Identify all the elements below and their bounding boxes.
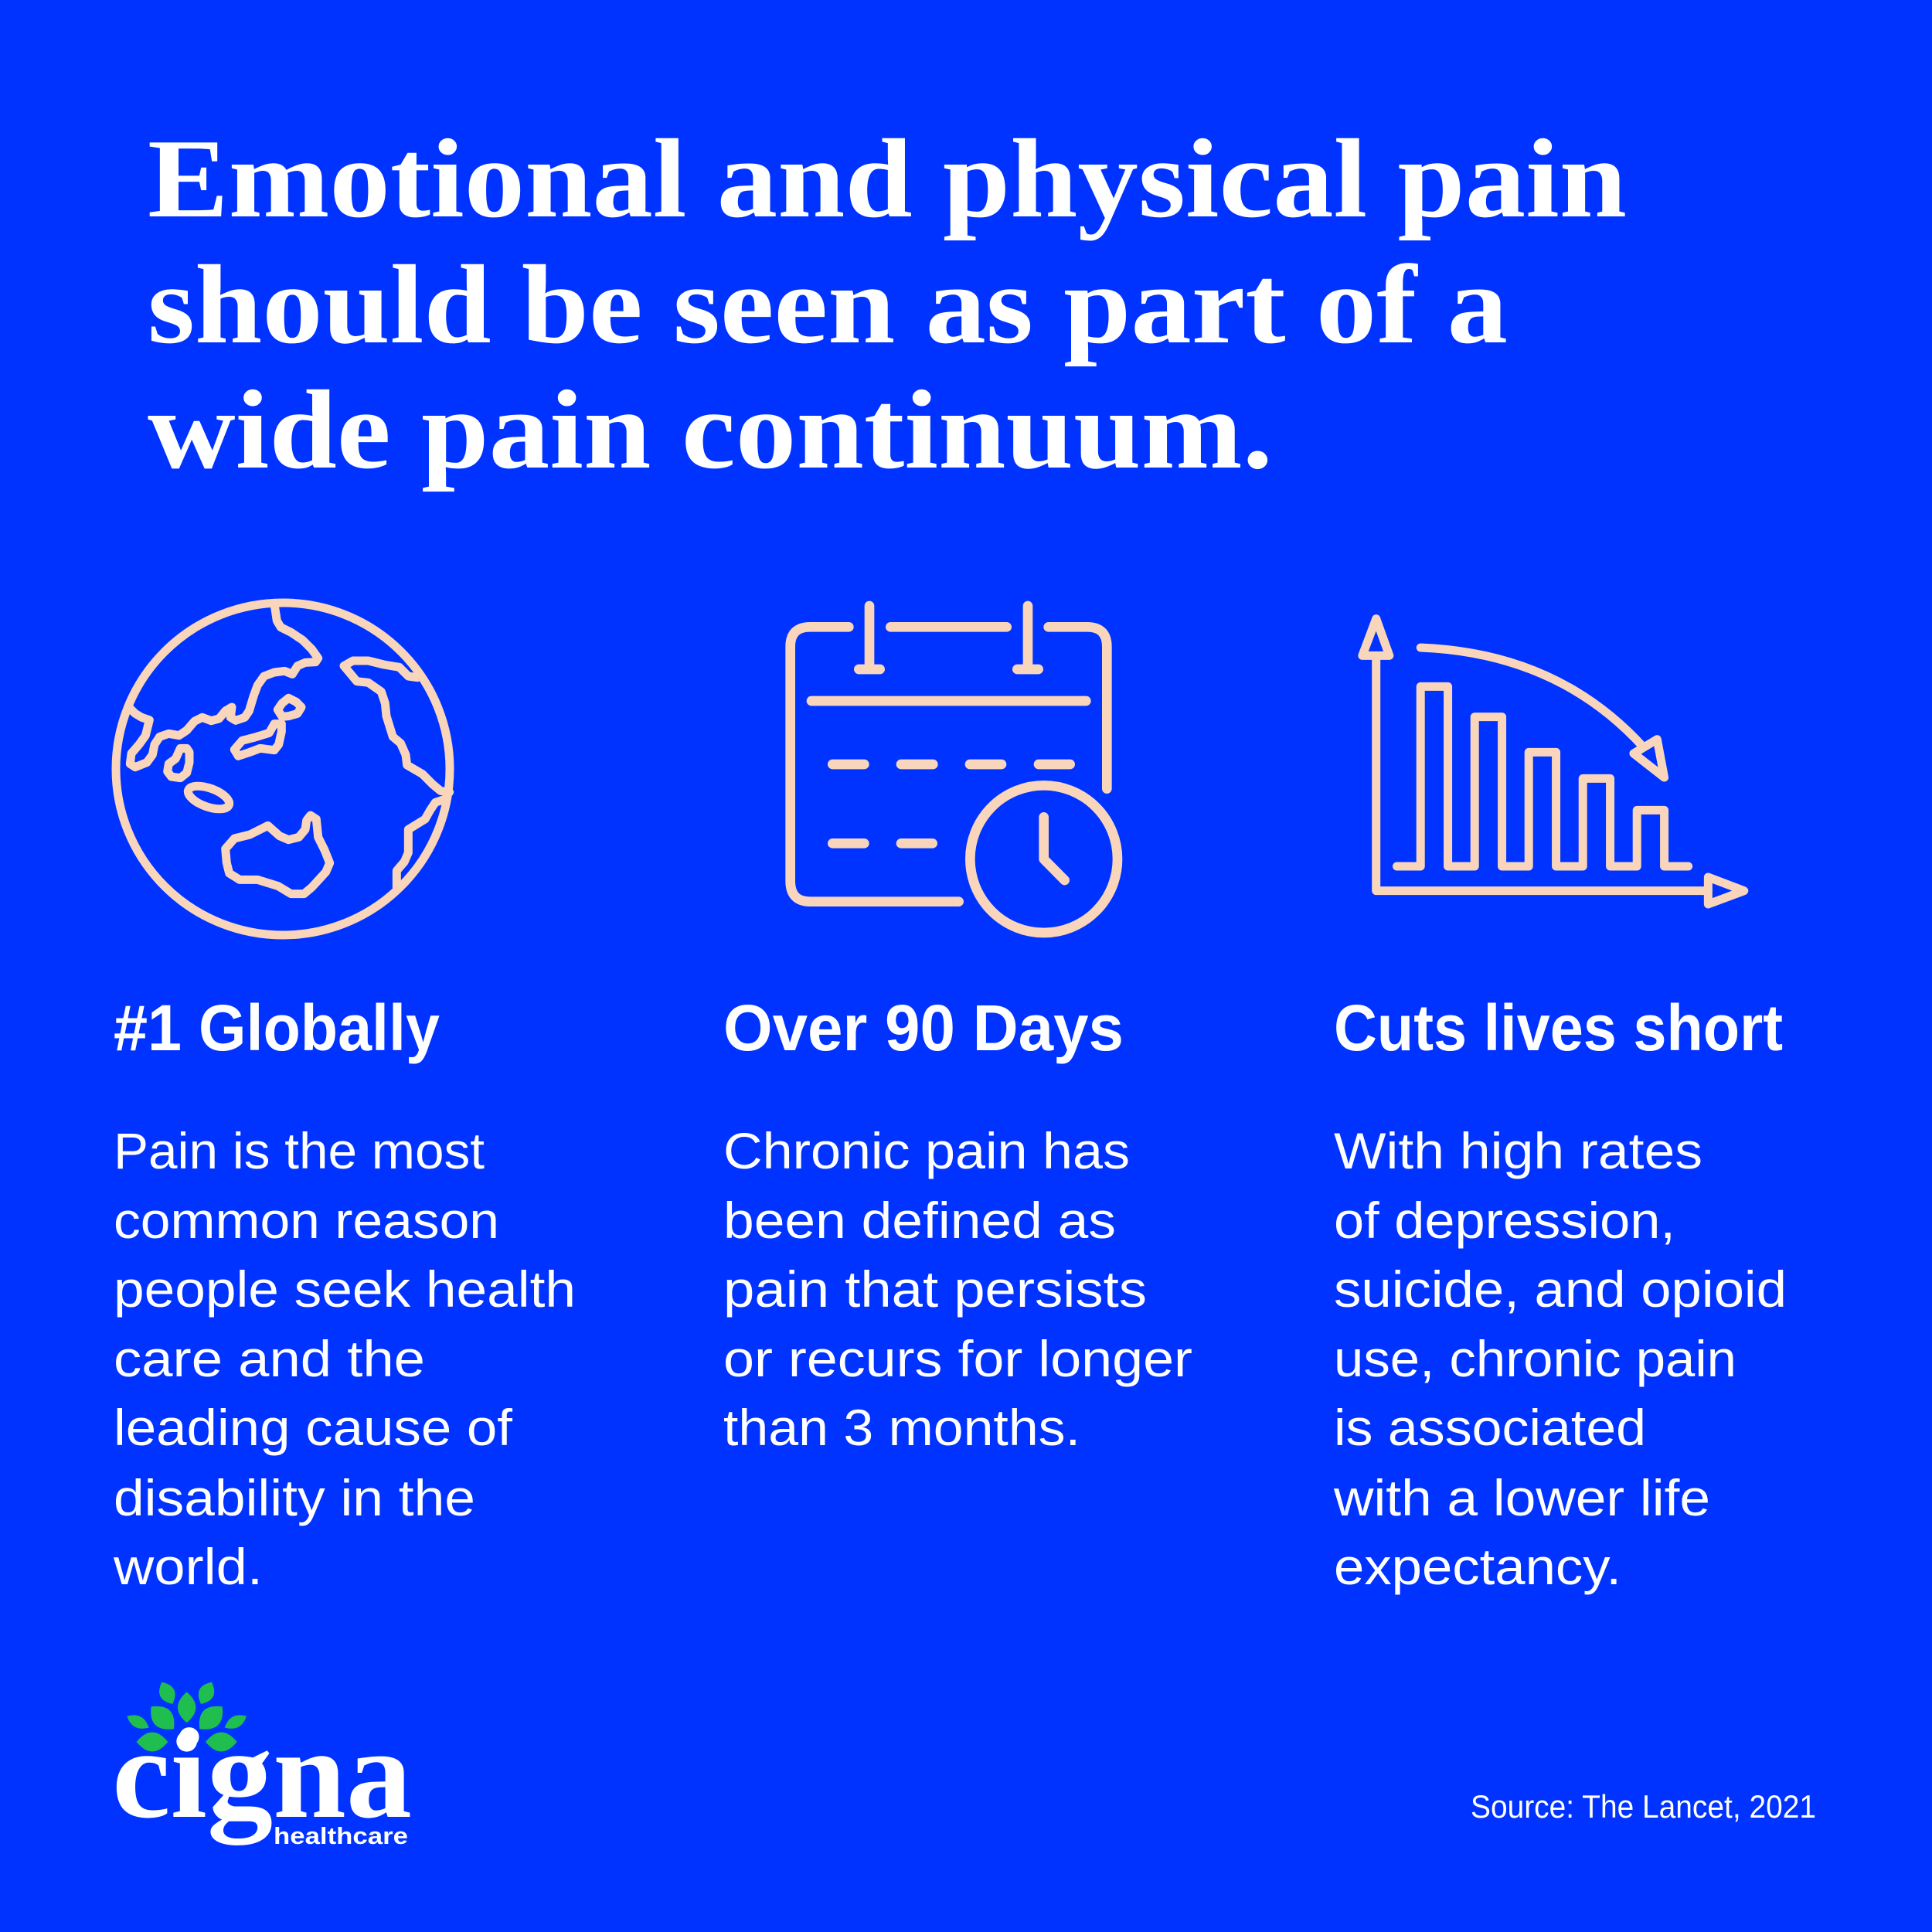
title: should be seen as part of a bbox=[148, 242, 1508, 367]
text block: chronic pain definition: been defined as bbox=[723, 1192, 1116, 1249]
heading: #1 Globally: #1 Globally bbox=[114, 992, 440, 1064]
title: wide pain continuum. bbox=[148, 367, 1273, 492]
text block: lower life expectancy bbox=[1333, 1122, 1787, 1595]
wordmark: healthcare: healthcare bbox=[274, 1822, 408, 1849]
text block: lower life expectancy: with a lower life bbox=[1333, 1469, 1710, 1526]
text block: lower life expectancy: use, chronic pain bbox=[1334, 1330, 1736, 1387]
icon: globe bbox=[116, 603, 450, 935]
text block: pain most common reason: Pain is the most bbox=[114, 1122, 485, 1179]
logo: cigna healthcare bbox=[112, 1682, 412, 1849]
text block: pain most common reason: world. bbox=[113, 1538, 263, 1595]
icon: declining bar chart bbox=[1362, 619, 1744, 904]
text block: lower life expectancy: of depression, bbox=[1334, 1192, 1675, 1249]
text block: pain most common reason: people seek health bbox=[114, 1260, 576, 1318]
heading: Over 90 Days: Over 90 Days bbox=[723, 992, 1124, 1064]
column 1: #1 Globally bbox=[113, 992, 576, 1595]
icon: green leaves bbox=[127, 1682, 247, 1752]
heading: Cuts lives short: Cuts lives short bbox=[1334, 992, 1783, 1064]
text block: lower life expectancy: suicide, and opioid bbox=[1334, 1260, 1787, 1318]
text block: lower life expectancy: With high rates bbox=[1334, 1122, 1702, 1179]
text block: chronic pain definition: pain that persists bbox=[723, 1260, 1147, 1318]
text block: pain most common reason: leading cause of bbox=[114, 1399, 513, 1456]
text block: pain most common reason: care and the bbox=[114, 1330, 425, 1387]
text block: chronic pain definition: than 3 months. bbox=[723, 1399, 1080, 1456]
title: Emotional and physical pain bbox=[148, 116, 1627, 241]
source note: Source: The Lancet, 2021 bbox=[1471, 1788, 1816, 1825]
text block: chronic pain definition: or recurs for longer bbox=[723, 1330, 1192, 1387]
text block: lower life expectancy: is associated bbox=[1334, 1399, 1646, 1456]
icon: calendar with clock bbox=[791, 606, 1117, 933]
text block: pain most common reason bbox=[113, 1122, 576, 1595]
title bbox=[148, 116, 1627, 492]
text block: chronic pain definition bbox=[723, 1122, 1192, 1456]
text block: pain most common reason: common reason bbox=[114, 1192, 499, 1249]
text block: pain most common reason: disability in the bbox=[114, 1469, 475, 1526]
text block: lower life expectancy: expectancy. bbox=[1334, 1538, 1621, 1595]
text block: chronic pain definition: Chronic pain has bbox=[723, 1122, 1130, 1179]
column 3: Cuts lives short bbox=[1333, 992, 1787, 1595]
column 2: Over 90 Days bbox=[723, 992, 1192, 1456]
wordmark: cigna: cigna bbox=[112, 1702, 412, 1845]
